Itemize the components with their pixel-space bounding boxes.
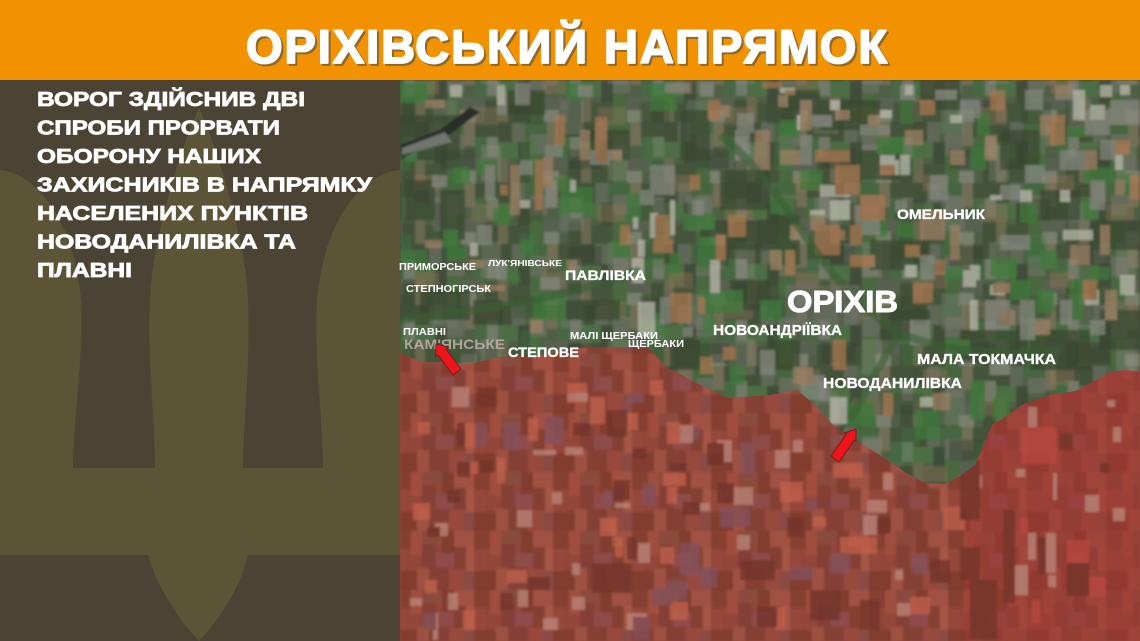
label: Кам'янське: КАМ'ЯНСЬКЕ [404,336,505,352]
label: Мала Токмачка: МАЛА ТОКМАЧКА [917,352,1057,368]
label: Малі Щербаки: МАЛІ ЩЕРБАКИ [570,331,658,342]
text block: description: НОВОДАНИЛІВКА ТА [37,230,296,254]
header [0,0,1140,80]
icon: trident watermark [0,108,400,641]
label: Оріхів: ОРІХІВ [787,284,898,319]
label: Степове: СТЕПОВЕ [508,344,579,360]
text block: description: ОБОРОНУ НАШИХ [37,145,261,168]
arrow: attack on Новоданилівка [831,429,856,462]
label: Новоданилівка: НОВОДАНИЛІВКА [823,376,963,392]
label: Лук'янівське: ЛУК'ЯНІВСЬКЕ [488,258,562,268]
satellite map [400,80,1140,641]
left panel background [0,0,400,641]
label: Щербаки: ЩЕРБАКИ [628,339,684,350]
label: Плавні: ПЛАВНІ [403,327,446,338]
text block: description: ЗАХИСНИКІВ В НАПРЯМКУ [37,174,372,196]
text block: description: НАСЕЛЕНИХ ПУНКТІВ [37,202,308,225]
label: Павлівка: ПАВЛІВКА [565,267,646,283]
label: Новоандріївка: НОВОАНДРІЇВКА [713,322,843,339]
text block: description [37,87,372,282]
label: Степногірськ: СТЕПНОГІРСЬК [406,284,492,295]
arrow: attack on Плавні [436,344,461,375]
text block: description: ПЛАВНІ [37,259,132,282]
enemy-held zone [400,340,1140,641]
label: Омельник: ОМЕЛЬНИК [897,206,985,222]
title: ОРІХІВСЬКИЙ НАПРЯМОК [246,20,887,73]
text block: description: ВОРОГ ЗДІЙСНИВ ДВІ [37,87,305,111]
text block: description: СПРОБИ ПРОРВАТИ [37,116,280,140]
label: Приморське: ПРИМОРСЬКЕ [399,262,476,273]
urban area [785,285,860,325]
green river corridors [400,135,1060,420]
